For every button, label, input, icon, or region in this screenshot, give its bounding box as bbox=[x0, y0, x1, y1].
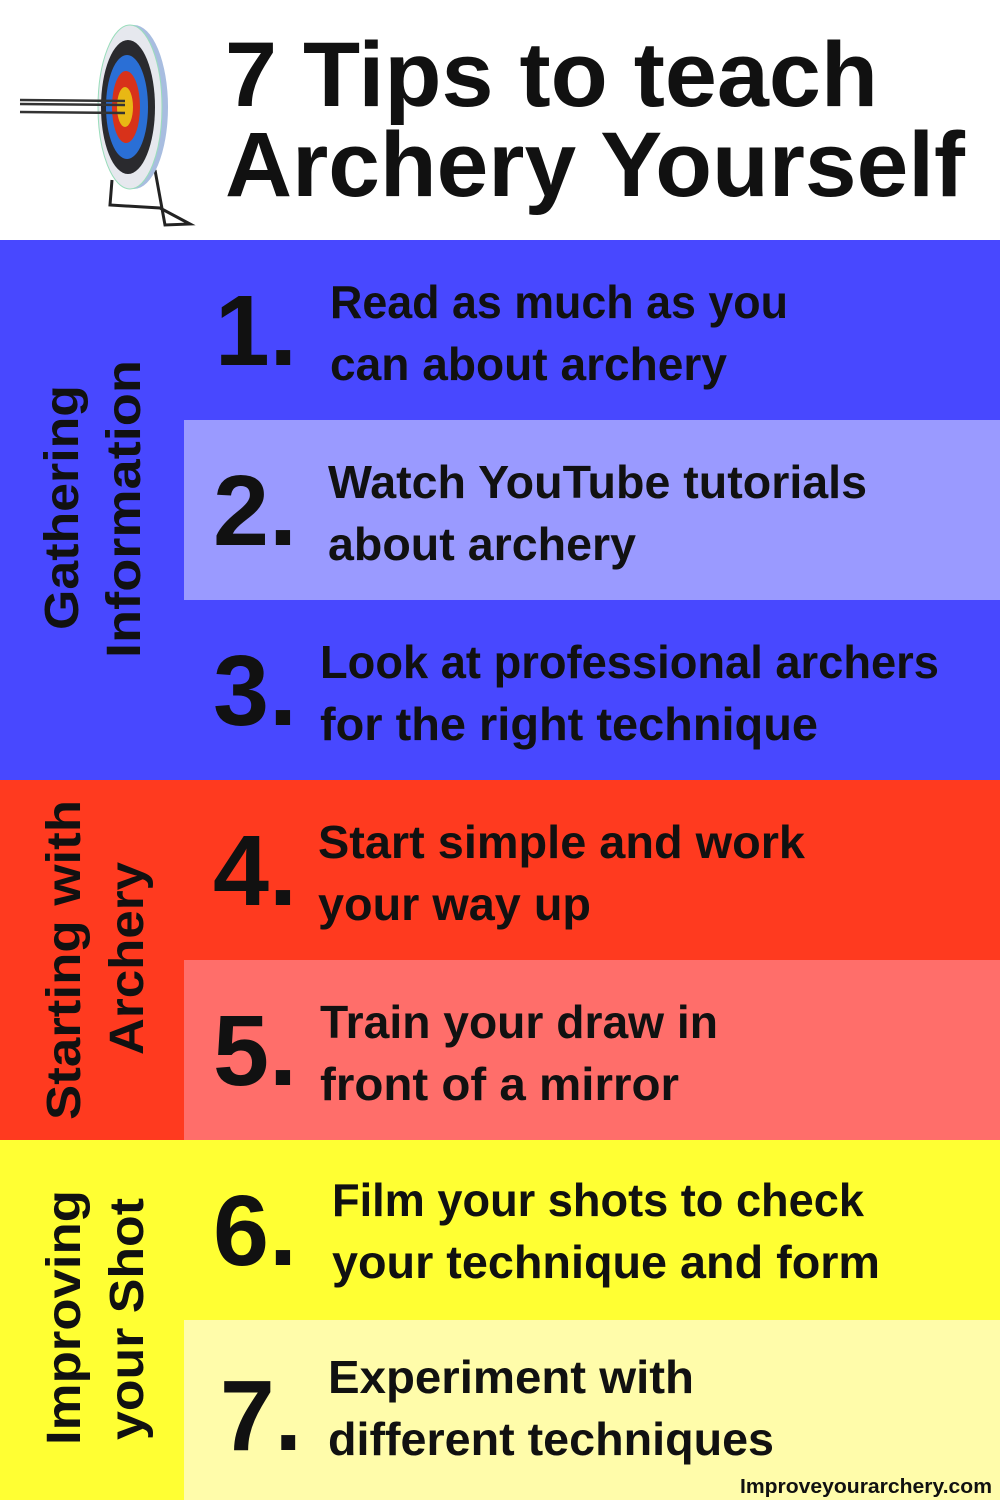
footer: website: Improveyourarchery.com bbox=[740, 1476, 992, 1498]
tip 5: front of a mirror bbox=[320, 1058, 679, 1110]
sidebar label: Gathering Information bbox=[36, 360, 151, 658]
tip 7: Experiment with bbox=[328, 1351, 694, 1403]
tip 3: 3. bbox=[213, 635, 297, 747]
tip 5 bbox=[213, 995, 718, 1110]
tip 5: Train your draw in bbox=[320, 996, 718, 1048]
tip 6: Film your shots to check bbox=[332, 1174, 864, 1226]
sidebar label: Starting with Archery bbox=[38, 800, 154, 1120]
sidebar label: Gathering Information: Gathering bbox=[36, 385, 89, 630]
sidebar label: Gathering Information: Information bbox=[98, 360, 151, 658]
tip 2: about archery bbox=[328, 518, 636, 570]
tip 4: Start simple and work bbox=[318, 816, 805, 868]
tip 5: 5. bbox=[213, 995, 297, 1107]
tip 6 bbox=[213, 1174, 880, 1288]
tip 2: Watch YouTube tutorials bbox=[328, 456, 867, 508]
tip 7: 7. bbox=[220, 1360, 302, 1472]
tip 3 bbox=[213, 635, 939, 750]
tip 4: 4. bbox=[213, 815, 297, 927]
tip 2: 2. bbox=[213, 455, 297, 567]
title: Archery Yourself bbox=[225, 114, 965, 216]
title: 7 Tips to teach bbox=[225, 24, 878, 126]
sidebar label: Starting with Archery: Archery bbox=[101, 862, 154, 1055]
panel: starting with archery bbox=[0, 780, 1000, 1140]
tip 4: your way up bbox=[318, 878, 591, 930]
sidebar label: Improving your Shot bbox=[38, 1190, 154, 1445]
icon: archery target bbox=[20, 25, 190, 225]
tip 3: for the right technique bbox=[320, 698, 818, 750]
title bbox=[225, 24, 965, 216]
panel: improving your shot bbox=[0, 1140, 1000, 1500]
tip 1: 1. bbox=[215, 275, 297, 387]
sidebar label: Improving your Shot: Improving bbox=[38, 1190, 91, 1445]
tip 7 bbox=[220, 1351, 774, 1472]
tip 6: your technique and form bbox=[332, 1236, 880, 1288]
tip 4 bbox=[213, 815, 805, 930]
tip 3: Look at professional archers bbox=[320, 636, 939, 688]
tip 7: different techniques bbox=[328, 1413, 774, 1465]
panel: gathering information bbox=[0, 240, 1000, 780]
tip 1: Read as much as you bbox=[330, 276, 788, 328]
tip 1 bbox=[215, 275, 788, 390]
tip 6: 6. bbox=[213, 1175, 297, 1287]
tip 2 bbox=[213, 455, 867, 570]
header background bbox=[0, 0, 1000, 240]
sidebar label: Starting with Archery: Starting with bbox=[38, 800, 91, 1120]
tip 1: can about archery bbox=[330, 338, 727, 390]
sidebar label: Improving your Shot: your Shot bbox=[101, 1198, 154, 1440]
